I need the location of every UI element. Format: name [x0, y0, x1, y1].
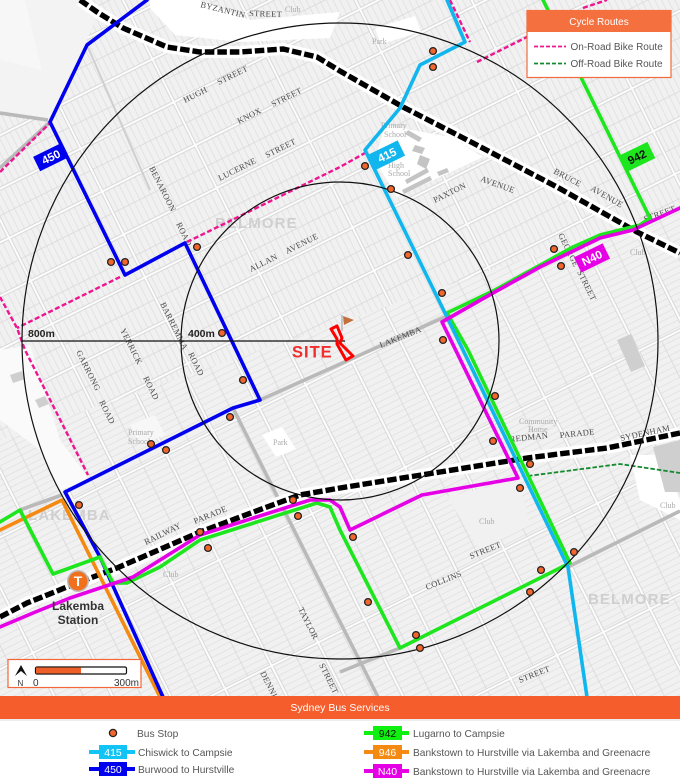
street labels: TAYLOR [296, 605, 321, 641]
route badge 450 [33, 143, 69, 171]
legend: route 450: 450 [104, 764, 122, 776]
street labels: YERRICK [118, 326, 145, 367]
distance labels: 400m [188, 328, 215, 340]
distance labels [28, 328, 215, 340]
place labels: School [388, 169, 411, 178]
street labels: STREET [517, 663, 552, 685]
street labels: STREET [317, 661, 341, 696]
legend: route N40: Bankstown to Hurstville via Lakemba and Greenacre [413, 767, 651, 778]
site marker: SITE [292, 344, 333, 362]
map base: southern street grid [0, 205, 680, 697]
route badge N40: N40 [580, 249, 605, 269]
place labels: Primary [381, 121, 407, 130]
bus services legend panel: Sydney Bus Services [290, 702, 390, 714]
place labels: Park [372, 37, 387, 46]
legend: route 450 [89, 762, 235, 776]
street labels: GEORGE [556, 231, 581, 268]
street labels: REDMAN [509, 430, 549, 444]
bus services legend panel [0, 696, 680, 783]
scale bar and north arrow: 300m [114, 678, 139, 689]
legend: route 450: Burwood to Hurstville [138, 765, 235, 776]
street labels: GARRONG [74, 348, 103, 392]
street labels: BENAROON [147, 164, 178, 213]
street labels: ROAD [186, 350, 206, 378]
suburb labels: BELMORE [215, 215, 298, 232]
railway line [0, 0, 680, 617]
street labels: PARADE [192, 503, 228, 526]
legend: route 946: Bankstown to Hurstville via Lakemba and Greenacre [413, 748, 651, 759]
place labels: Primary [128, 428, 154, 437]
off-road cycle route [528, 464, 680, 476]
place labels: Community [519, 417, 557, 426]
bus route 450 [50, 0, 260, 697]
street labels: BARREMMA [158, 300, 191, 352]
place labels: Club [479, 517, 495, 526]
street labels: ROAD [141, 374, 161, 402]
street labels: LAKEMBA [378, 324, 423, 350]
street labels: AVENUE [479, 173, 516, 195]
Lakemba Station icon and label: Lakemba [52, 599, 104, 613]
place labels: High [388, 161, 404, 170]
Lakemba Station icon and label [52, 570, 104, 627]
scale bar and north arrow: 0 [33, 678, 39, 689]
bus route 946 [0, 500, 160, 697]
scale bar and north arrow [8, 660, 141, 689]
Lakemba Station icon and label: T [74, 573, 83, 589]
street labels: STREET [249, 8, 283, 19]
suburb labels: LAKEMBA [28, 507, 111, 524]
place labels: Club [660, 501, 676, 510]
street labels: ALLAN [247, 251, 279, 274]
legend: route N40: N40 [378, 766, 397, 778]
street labels: AVENUE [589, 183, 625, 210]
street labels: AVENUE [283, 231, 320, 256]
street labels: STREET [575, 268, 599, 303]
legend: route N40 [364, 764, 651, 778]
scale bar and north arrow: N [18, 679, 24, 688]
route badge 942 [619, 142, 655, 172]
street labels: DENNIS [258, 669, 282, 703]
street labels [74, 0, 677, 703]
route badge 450: 450 [40, 148, 63, 167]
bus route 942 [0, 0, 650, 648]
legend: bus stop: Bus Stop [137, 729, 179, 740]
cycle routes legend: Off-Road Bike Route [570, 59, 663, 70]
bus route N40 [0, 208, 680, 627]
route badge 415: 415 [376, 146, 399, 165]
street labels: PARADE [559, 426, 595, 440]
street labels: STREET [468, 539, 503, 561]
legend: route 942 [364, 726, 505, 740]
legend: route 415: 415 [104, 747, 122, 759]
legend: route 415 [89, 745, 233, 759]
street labels: HUGH [181, 84, 209, 105]
legend: route 942: Lugarno to Campsie [413, 729, 505, 740]
railway corridor [0, 0, 680, 617]
cycle routes legend [527, 10, 671, 78]
street labels: PAXTON [431, 180, 468, 205]
street labels: KNOX [235, 105, 263, 126]
street labels: SYDENHAM [619, 423, 671, 443]
place labels: Club [163, 570, 179, 579]
legend: route 415: Chiswick to Campsie [138, 748, 233, 759]
place labels: School [384, 130, 407, 139]
place labels [128, 5, 676, 579]
legend: route 946: 946 [379, 747, 396, 759]
site marker [292, 315, 354, 362]
place labels: Home [528, 425, 548, 434]
route badge N40 [574, 243, 610, 273]
cycle routes legend: On-Road Bike Route [570, 42, 663, 53]
street labels: STREET [263, 136, 298, 160]
street labels: BRUCE [552, 166, 583, 189]
street labels: RAILWAY [142, 520, 183, 547]
place labels: Park [273, 438, 288, 447]
on-road cycle routes [0, 0, 607, 475]
suburb labels: BELMORE [588, 591, 671, 608]
place labels: School [128, 437, 151, 446]
street labels: ROAD [97, 398, 117, 426]
street labels: STREET [215, 63, 250, 87]
distance rings [22, 23, 658, 659]
street labels: ROAD [174, 220, 194, 248]
street labels: STREET [642, 203, 677, 224]
street labels: LUCERNE [216, 155, 258, 183]
bus route 415 [365, 0, 587, 697]
place labels: Club [285, 5, 301, 14]
street labels: COLLINS [424, 568, 463, 592]
route badge 942: 942 [626, 148, 649, 167]
bus stops [76, 48, 577, 651]
legend: bus stop [109, 729, 179, 740]
Lakemba Station icon and label: Station [58, 613, 98, 627]
legend: route 946 [364, 745, 651, 759]
distance labels: 800m [28, 328, 55, 340]
place labels: Club [630, 248, 646, 257]
suburb labels [28, 215, 671, 608]
cycle routes legend: Cycle Routes [569, 17, 629, 28]
route badge 415 [369, 140, 405, 170]
street labels: STREET [269, 85, 304, 109]
legend: route 942: 942 [379, 728, 396, 740]
